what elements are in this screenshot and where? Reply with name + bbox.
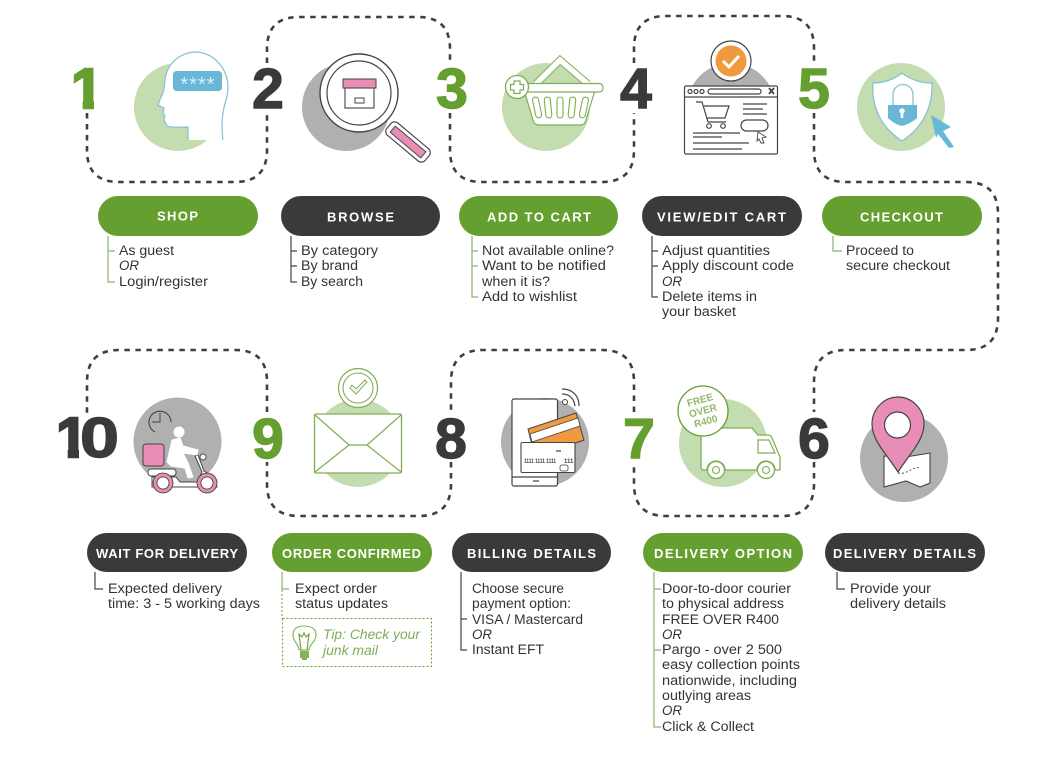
- pill: order confirmed: [272, 533, 432, 572]
- pill: add to cart: [459, 196, 618, 236]
- step 7: delivery option: [623, 386, 803, 734]
- list: delivery option: easy collection points: [662, 657, 800, 672]
- pill: add to cart: ADD TO CART: [487, 210, 591, 224]
- list: order confirmed: status updates: [295, 596, 388, 611]
- pill: wait for delivery: [87, 533, 247, 572]
- icon: map with location pin: [860, 397, 948, 502]
- list: checkout: Proceed to: [846, 243, 914, 258]
- list: delivery option: FREE OVER R400: [662, 612, 779, 627]
- list: delivery details: delivery details: [850, 596, 946, 611]
- pill: checkout: CHECKOUT: [860, 210, 943, 224]
- step 1: shop: [71, 52, 258, 289]
- list: delivery details: Provide your: [850, 581, 932, 596]
- step 2: browse: [252, 54, 440, 289]
- number 8: 8: [435, 407, 467, 471]
- list: delivery option: Door-to-door courier: [662, 581, 792, 596]
- list: delivery option: OR: [662, 703, 682, 718]
- icon: phone and payment cards: 1111 1111 1111: [524, 459, 557, 465]
- list: checkout: secure checkout: [846, 258, 950, 273]
- number 6: 6: [798, 407, 830, 471]
- list: shop: OR: [119, 258, 139, 273]
- list: view/edit cart: Delete items in: [662, 289, 757, 304]
- list: browse: [291, 236, 378, 289]
- list: billing details: OR: [472, 627, 492, 642]
- number 10: 1: [56, 406, 88, 470]
- pill: delivery option: DELIVERY OPTION: [654, 546, 792, 561]
- number 2: 2: [252, 57, 284, 121]
- icon: delivery truck with free over R400 badge: OVER: [688, 402, 719, 420]
- list: add to cart: Not available online?: [482, 243, 614, 258]
- list: add to cart: Want to be notified: [482, 258, 606, 273]
- list: delivery option: Pargo - over 2 500: [662, 642, 782, 657]
- dashed route connecting the steps: [87, 16, 998, 516]
- icon: phone and payment cards: 111: [564, 459, 574, 465]
- icon: light bulb: [293, 626, 316, 660]
- list: browse: By category: [301, 243, 378, 258]
- list: view/edit cart: [652, 236, 794, 319]
- pill: delivery option: [643, 533, 803, 572]
- list: browse: By brand: [301, 258, 358, 273]
- list: shop: Login/register: [119, 274, 209, 289]
- list: add to cart: [472, 236, 614, 304]
- icon: basket: [502, 60, 603, 151]
- list: view/edit cart: OR: [662, 274, 682, 289]
- icon: delivery truck with free over R400 badge: FREE: [686, 392, 715, 410]
- number 1: 1: [71, 57, 103, 121]
- list: billing details: payment option:: [472, 596, 571, 611]
- step 9: order confirmed: [252, 368, 432, 666]
- callout: junk mail tip: junk mail: [321, 643, 379, 658]
- pill: shop: [98, 196, 258, 236]
- list: browse: By search: [301, 274, 363, 289]
- icon: scooter courier: [134, 398, 222, 491]
- number 3: 3: [436, 57, 468, 121]
- pill: billing details: BILLING DETAILS: [467, 546, 596, 561]
- pill: delivery details: [825, 533, 985, 572]
- list: view/edit cart: Adjust quantities: [662, 243, 770, 258]
- list: checkout: [833, 236, 950, 273]
- pill: delivery details: DELIVERY DETAILS: [833, 546, 976, 561]
- list: delivery option: to physical address: [662, 596, 784, 611]
- list: view/edit cart: Apply discount code: [662, 258, 794, 273]
- icon: delivery truck with free over R400 badge: [678, 386, 780, 487]
- list: add to cart: Add to wishlist: [482, 289, 577, 304]
- list: delivery option: [654, 572, 800, 734]
- list: wait for delivery: [95, 572, 260, 611]
- list: wait for delivery: Expected delivery: [108, 581, 222, 596]
- number 10: [58, 416, 117, 458]
- list: add to cart: when it is?: [481, 274, 550, 289]
- icon: head with password: ****: [180, 74, 216, 96]
- step 4: view/edit cart: [620, 41, 802, 319]
- callout: junk mail tip: Tip: Check your: [323, 627, 421, 642]
- number 10: 0: [80, 406, 119, 470]
- icon: envelope with check badge: [314, 368, 402, 487]
- pill: wait for delivery: WAIT FOR DELIVERY: [96, 546, 238, 561]
- pill: checkout: [822, 196, 982, 236]
- pill: order confirmed: ORDER CONFIRMED: [282, 546, 421, 561]
- list: order confirmed: [282, 572, 388, 618]
- number 9: 9: [252, 407, 284, 471]
- list: view/edit cart: your basket: [662, 304, 736, 319]
- list: delivery option: OR: [662, 627, 682, 642]
- pill: view/edit cart: [642, 196, 802, 236]
- step 6: delivery details: [798, 397, 985, 611]
- pill: billing details: [452, 533, 611, 572]
- icon: browser window with cart: [684, 41, 778, 154]
- icon: head with password: [134, 52, 228, 151]
- icon: shield with padlock and cursor: [857, 63, 954, 151]
- pill: shop: SHOP: [157, 208, 198, 224]
- pill: browse: BROWSE: [327, 210, 394, 224]
- pill: browse: [281, 196, 440, 236]
- icon: phone and payment cards: [501, 389, 589, 486]
- step 8: billing details: [435, 389, 611, 657]
- list: delivery option: nationwide, including: [662, 673, 797, 688]
- list: wait for delivery: time: 3 - 5 working days: [108, 596, 260, 611]
- list: billing details: VISA / Mastercard: [472, 612, 583, 627]
- step 5: checkout: [798, 57, 982, 273]
- callout: junk mail tip: [282, 618, 432, 666]
- list: delivery option: Click & Collect: [662, 719, 754, 734]
- list: billing details: Instant EFT: [472, 642, 544, 657]
- step 3: add to cart: [436, 57, 618, 304]
- number 7: 7: [623, 407, 655, 471]
- list: shop: As guest: [119, 243, 174, 258]
- pill: view/edit cart: VIEW/EDIT CART: [657, 210, 786, 224]
- number 5: 5: [798, 57, 830, 121]
- step 10: wait for delivery: [56, 398, 260, 611]
- list: delivery details: [837, 572, 946, 611]
- list: billing details: Choose secure: [472, 581, 564, 596]
- number 4: 4: [620, 57, 652, 121]
- icon: magnifier over box: [302, 54, 432, 164]
- list: billing details: [461, 572, 583, 657]
- list: order confirmed: Expect order: [295, 581, 378, 596]
- list: shop: [108, 236, 209, 289]
- list: delivery option: outlying areas: [662, 688, 751, 703]
- icon: delivery truck with free over R400 badge: R400: [693, 414, 719, 431]
